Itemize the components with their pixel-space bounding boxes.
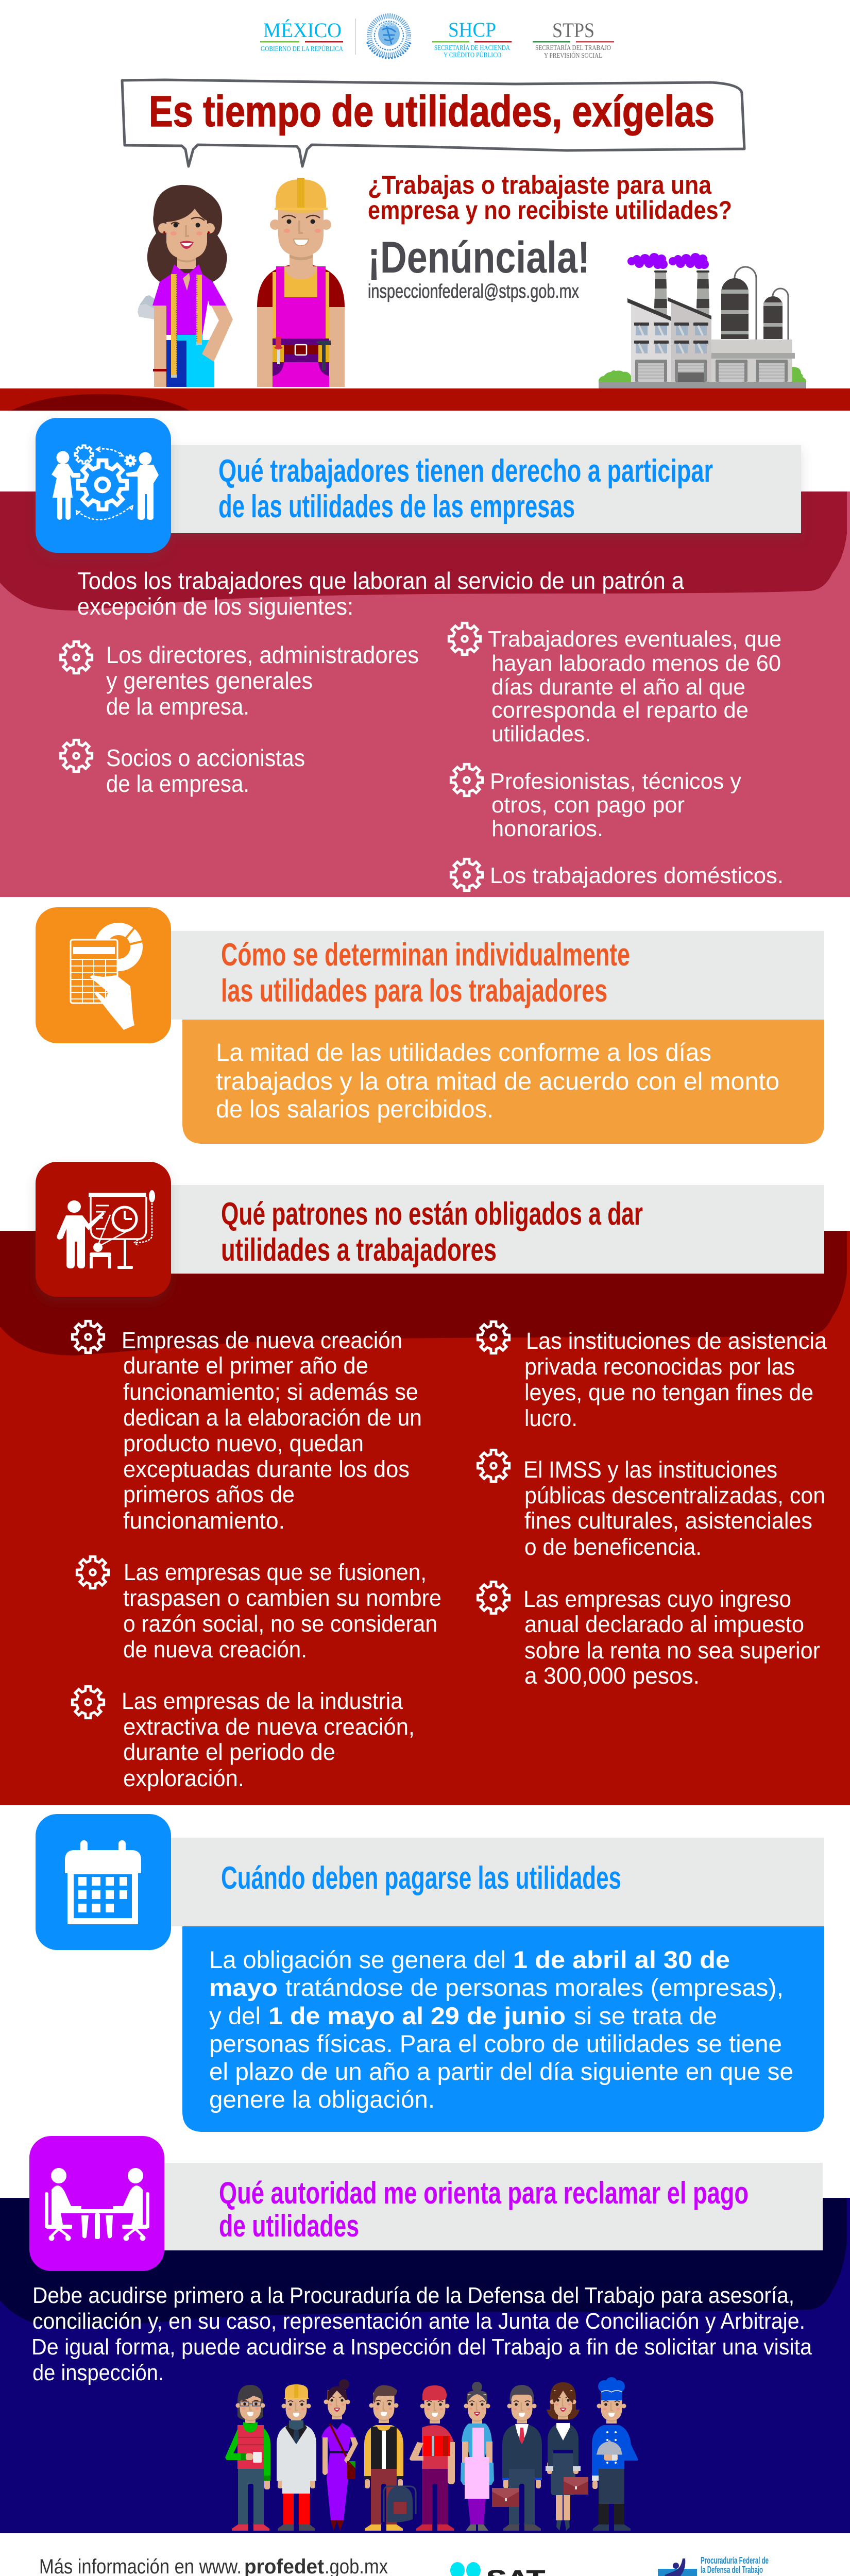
body text — [31, 2283, 812, 2385]
panel: how profits are determined — [36, 907, 824, 1144]
list item: temporary workers: corresponda el reparto de — [491, 698, 749, 723]
body text — [209, 1946, 793, 2113]
list item: professionals: otros, con pago por — [491, 792, 685, 818]
section bar — [171, 1838, 824, 1926]
section bar — [171, 931, 824, 1020]
heading: Cuándo deben pagarse las utilidades — [221, 1860, 621, 1896]
body text: 1 de abril al 30 de — [513, 1946, 730, 1973]
heading: Qué patrones no están obligados a dar — [221, 1196, 643, 1232]
list item: partners — [60, 740, 305, 797]
footer — [39, 2555, 787, 2576]
illustration: factory — [599, 253, 806, 388]
body text: genere la obligación. — [209, 2086, 435, 2113]
body text: de los salarios percibidos. — [216, 1096, 494, 1123]
body card — [182, 1020, 824, 1144]
heading — [218, 453, 713, 524]
contact email: inspeccionfederal@stps.gob.mx — [368, 281, 579, 302]
person: woman in suit with briefcase — [546, 2382, 588, 2531]
list item: low income companies: sobre la renta no sea superior — [524, 1637, 820, 1664]
heading: de utilidades — [219, 2209, 359, 2243]
list item: low income companies: a 300,000 pesos. — [524, 1663, 700, 1689]
panel: which authority advises — [0, 2136, 850, 2533]
body text: Debe acudirse primero a la Procuraduría de la Defensa del Trabajo para asesoría, — [32, 2283, 794, 2308]
body text: trabajados y la otra mitad de acuerdo con el monto — [216, 1068, 779, 1095]
list item: domestic workers: Los trabajadores domésticos. — [490, 863, 784, 888]
logo: PROFEDET: la Defensa del Trabajo — [701, 2565, 763, 2575]
list item: temporary workers: hayan laborado menos de 60 — [491, 651, 781, 676]
list item: IMSS: o de beneficencia. — [524, 1534, 702, 1560]
logo: SHCP: SHCP — [448, 18, 496, 41]
list item: private assistance: leyes, que no tengan fines de — [524, 1379, 813, 1405]
body text: de inspección. — [32, 2360, 164, 2385]
body text: y del — [209, 2002, 261, 2029]
person: woman in purple dress with bag — [321, 2379, 358, 2531]
person: vest and backpack — [364, 2385, 416, 2531]
panel: when profits must be paid — [36, 1814, 824, 2132]
list item: partners: de la empresa. — [106, 770, 249, 797]
list item: extractive industry: exploración. — [123, 1765, 244, 1791]
list item: directors: de la empresa. — [106, 693, 249, 720]
person: chef with cloche — [592, 2377, 638, 2531]
list item: private assistance: privada reconocidas por las — [524, 1353, 795, 1380]
icon: calendar — [36, 1814, 171, 1950]
list item: new companies: primeros años de — [123, 1481, 295, 1507]
person: sweater and mug — [225, 2385, 270, 2531]
intro text: excepción de los siguientes: — [77, 593, 353, 620]
intro text: Todos los trabajadores que laboran al servicio de un patrón a — [77, 567, 684, 594]
person: man in suit with briefcase — [492, 2385, 542, 2531]
list item: professionals: Profesionistas, técnicos y — [490, 769, 741, 794]
logo: STPS: SECRETARÍA DEL TRABAJO — [535, 43, 611, 52]
red band — [0, 388, 850, 411]
heading: las utilidades para los trabajadores — [221, 973, 607, 1009]
section bar — [164, 2163, 823, 2250]
body text: conciliación y, en su caso, representación ante la Junta de Conciliación y Arbitraje. — [32, 2309, 805, 2334]
list item: IMSS: El IMSS y las instituciones — [523, 1456, 777, 1483]
list item: low income companies: anual declarado al impuesto — [524, 1611, 804, 1637]
list item: mergers: Las empresas que se fusionen, — [124, 1559, 427, 1585]
logo: SHCP: Y CRÉDITO PÚBLICO — [444, 50, 501, 59]
body text: La obligación se genera del — [209, 1946, 506, 1973]
body text: el plazo de un año a partir del día siguiente en que se — [209, 2058, 793, 2085]
list item: temporary workers: Trabajadores eventuales, que — [488, 626, 781, 652]
list item: mergers: de nueva creación. — [123, 1636, 307, 1663]
title: Es tiempo de utilidades, exígelas — [149, 87, 715, 135]
logo: SHCP — [432, 18, 512, 59]
body text: personas físicas. Para el cobro de utilidades se tiene — [209, 2030, 782, 2057]
body text: De igual forma, puede acudirse a Inspección del Trabajo a fin de solicitar una visita — [31, 2334, 812, 2360]
list item: new companies: durante el primer año de — [123, 1352, 368, 1379]
icon: meeting at table — [29, 2136, 164, 2271]
header logos — [260, 13, 614, 60]
logo: PROFEDET — [658, 2555, 787, 2576]
logo: México Gobierno de la República: MÉXICO — [263, 19, 342, 42]
list item: new companies: funcionamiento. — [123, 1507, 285, 1534]
list item: extractive industry — [72, 1686, 415, 1791]
list item: new companies — [72, 1321, 422, 1534]
list item: private assistance: Las instituciones de asistencia — [526, 1328, 827, 1354]
more information link — [39, 2555, 388, 2576]
list item: directors: y gerentes generales — [106, 667, 313, 694]
logo: STPS: STPS — [552, 19, 594, 42]
body text: La mitad de las utilidades conforme a los días — [216, 1039, 711, 1066]
logo: PROFEDET: Procuraduría Federal de — [701, 2555, 769, 2566]
logo: national seal — [366, 13, 412, 59]
list item: directors: Los directores, administradores — [106, 641, 419, 668]
list item: temporary workers — [449, 623, 781, 747]
list item: IMSS: públicas descentralizadas, con — [524, 1482, 825, 1509]
list item: extractive industry: extractiva de nueva creación, — [123, 1714, 415, 1740]
list item: IMSS: fines culturales, asistenciales — [524, 1507, 812, 1534]
question text: ¿Trabajas o trabajaste para una — [368, 171, 712, 199]
heading — [221, 1196, 643, 1268]
list item: new companies: dedican a la elaboración de un — [123, 1404, 422, 1431]
list item: IMSS — [478, 1450, 825, 1560]
person: red cap with box — [410, 2385, 455, 2531]
section bar — [171, 445, 801, 533]
panel: employers not obliged — [0, 1162, 850, 1805]
icon: people and gears — [36, 418, 171, 553]
heading: de las utilidades de las empresas — [218, 489, 575, 524]
illustration: worker with hard hat — [257, 178, 345, 387]
list item: mergers — [77, 1556, 441, 1663]
heading: Cómo se determinan individualmente — [221, 937, 630, 973]
list item: new companies: funcionamiento; si además se — [123, 1379, 418, 1405]
illustration: group of workers — [225, 2377, 638, 2531]
logo: STPS: Y PREVISIÓN SOCIAL — [544, 51, 602, 60]
icon: presenter at board — [36, 1162, 171, 1297]
question text: empresa y no recibiste utilidades? — [368, 196, 732, 225]
list item: new companies: producto nuevo, quedan — [123, 1430, 364, 1456]
call to action: ¡Denúnciala!: ¡Denúnciala! — [368, 233, 590, 282]
list item: private assistance — [478, 1321, 827, 1431]
intro text — [77, 567, 684, 620]
list item: extractive industry: durante el periodo de — [123, 1739, 335, 1765]
heading: utilidades a trabajadores — [221, 1232, 497, 1268]
body text: mayo — [209, 1974, 278, 2001]
logo: STPS — [533, 19, 614, 60]
heading — [221, 937, 630, 1009]
heading — [219, 2176, 749, 2243]
illustration: woman with tape measure — [138, 185, 233, 387]
body text: 1 de mayo al 29 de junio — [268, 2002, 566, 2029]
section bar — [171, 1185, 824, 1274]
list item: partners: Socios o accionistas — [106, 744, 305, 771]
list item: temporary workers: días durante el año al que — [491, 674, 745, 700]
list item: private assistance: lucro. — [524, 1405, 577, 1431]
list item: low income companies: Las empresas cuyo ingreso — [523, 1586, 791, 1612]
body card — [182, 1926, 824, 2132]
logo: México Gobierno de la República — [260, 19, 355, 55]
speech bubble with title — [122, 80, 744, 166]
list item: professionals — [451, 764, 741, 841]
body text: si se trata de — [574, 2002, 717, 2029]
body text — [216, 1039, 779, 1123]
logo: SAT — [450, 2562, 626, 2576]
question text — [368, 171, 732, 225]
person: lab coat and hard hat — [277, 2384, 316, 2531]
list item: low income companies — [478, 1582, 820, 1689]
list item: professionals: honorarios. — [491, 816, 603, 841]
panel: who has the right to participate — [0, 418, 850, 897]
logo: SHCP: SECRETARÍA DE HACIENDA — [434, 43, 511, 52]
body text: tratándose de personas morales (empresas), — [285, 1974, 784, 2001]
list item: mergers: traspasen o cambien su nombre — [123, 1585, 441, 1611]
icon: calculator and hand — [36, 907, 171, 1043]
list item: temporary workers: utilidades. — [491, 721, 591, 747]
list item: mergers: o razón social, no se consideran — [123, 1611, 437, 1637]
person: apron and gloves — [461, 2382, 494, 2531]
list item: directors — [60, 641, 419, 720]
list item: new companies: exceptuadas durante los dos — [123, 1456, 410, 1482]
list item: extractive industry: Las empresas de la industria — [122, 1688, 403, 1714]
logo: México Gobierno de la República: GOBIERNO DE LA REPÚBLICA — [261, 44, 344, 53]
list item: new companies: Empresas de nueva creación — [122, 1327, 402, 1353]
